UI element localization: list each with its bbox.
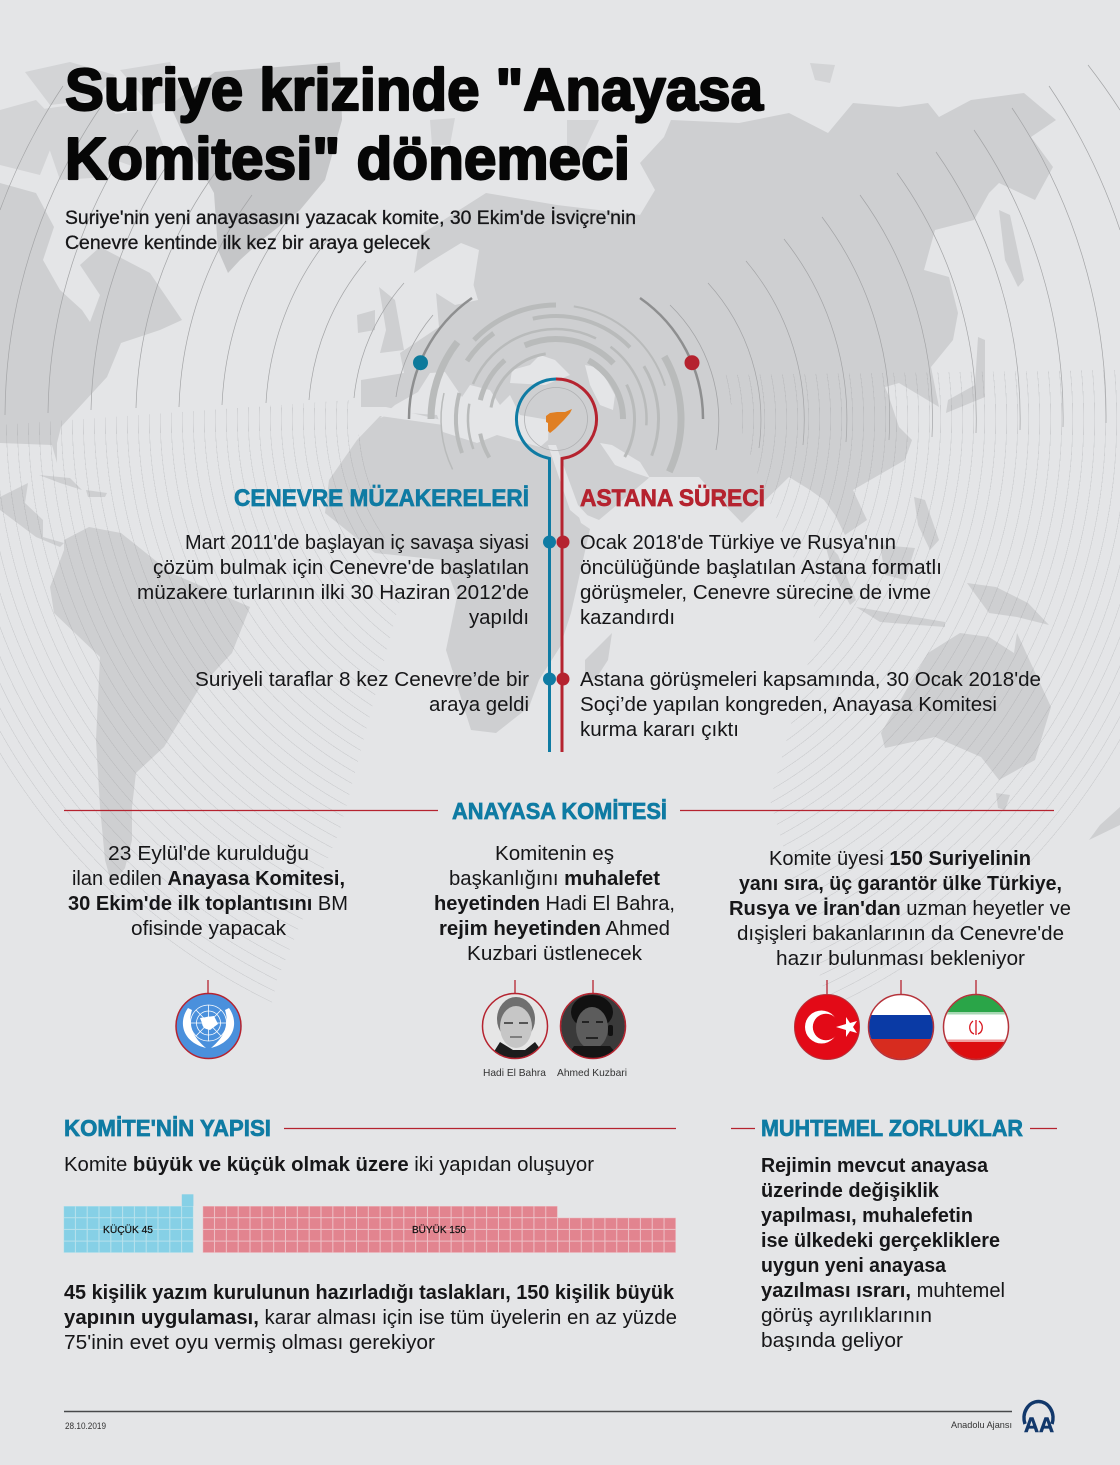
left arc with blue marker bbox=[409, 298, 472, 419]
text: structure intro: Komite büyük ve küçük olmak üzere iki yapıdan oluşuyor bbox=[64, 1154, 594, 1176]
text: column two: heyetinden Hadi El Bahra, bbox=[434, 893, 675, 915]
text: Geneva first item: Mart 2011'de başlayan iç savaşa siyasi bbox=[185, 532, 529, 554]
text: column three: hazır bulunması bekleniyor bbox=[776, 948, 1025, 970]
title: Suriye krizinde "Anayasa bbox=[65, 57, 764, 123]
right arc with red marker bbox=[640, 298, 703, 419]
text: column two: başkanlığını muhalefet bbox=[449, 868, 660, 890]
caption: Ahmed Kuzbari: Ahmed Kuzbari bbox=[557, 1067, 627, 1079]
text: possible difficulties: yazılması ısrarı, muhtemel bbox=[761, 1280, 1005, 1302]
footer rule bbox=[64, 1410, 1012, 1412]
text: Geneva second item bbox=[195, 669, 529, 716]
text: possible difficulties: başında geliyor bbox=[761, 1330, 903, 1352]
text: column one: ilan edilen Anayasa Komitesi, bbox=[72, 868, 345, 890]
text: possible difficulties: uygun yeni anayasa bbox=[761, 1255, 947, 1277]
world map background bbox=[0, 62, 1120, 885]
text: column two: rejim heyetinden Ahmed bbox=[439, 918, 670, 940]
text: column two bbox=[434, 843, 675, 965]
text: Astana first item: görüşmeler, Cenevre sürecine de ivme bbox=[580, 582, 931, 604]
text: possible difficulties: ise ülkedeki gerçekliklere bbox=[761, 1230, 1000, 1252]
text: Geneva second item: araya geldi bbox=[429, 694, 529, 716]
icon: Anadolu Agency logo: AA bbox=[1024, 1414, 1054, 1437]
text: possible difficulties: Rejimin mevcut anayasa bbox=[761, 1155, 989, 1177]
text: possible difficulties bbox=[761, 1155, 1005, 1352]
concentric fine ring lines bbox=[0, 360, 1120, 1020]
text: Astana second item: Astana görüşmeleri kapsamında, 30 Ocak 2018'de bbox=[580, 669, 1041, 691]
thin upper radar arcs bbox=[0, 65, 1120, 448]
heading: committee structure: KOMİTE'NİN YAPISI bbox=[64, 1115, 271, 1141]
unit chart: large body 150 bbox=[203, 1206, 676, 1253]
section heading: constitutional committee: ANAYASA KOMİTESİ bbox=[452, 798, 667, 824]
text: Geneva first item: müzakere turlarının ilki 30 Haziran 2012'de bbox=[137, 582, 529, 604]
text: column three: Rusya ve İran'dan uzman heyetler ve bbox=[729, 897, 1071, 920]
text: Astana second item bbox=[580, 669, 1041, 741]
text: column one: 30 Ekim'de ilk toplantısını BM bbox=[68, 893, 348, 915]
text: column one: 23 Eylül'de kurulduğu bbox=[108, 843, 309, 865]
text: column two: Kuzbari üstlenecek bbox=[467, 943, 643, 965]
text: structure explanation bbox=[64, 1282, 677, 1354]
text: structure explanation: 45 kişilik yazım kurulunun hazırladığı taslakları, 150 kişilik büyük bbox=[64, 1282, 675, 1304]
portrait: Ahmed Kuzbari bbox=[560, 980, 626, 1058]
text: column three: Komite üyesi 150 Suriyelinin bbox=[769, 848, 1031, 870]
unit chart: small body 45: KÜÇÜK 45 bbox=[103, 1224, 153, 1236]
text: column three bbox=[729, 848, 1071, 970]
text: Astana first item: Ocak 2018'de Türkiye ve Rusya'nın bbox=[580, 532, 896, 554]
text: possible difficulties: görüş ayrılıklarının bbox=[761, 1305, 932, 1327]
icon: flag of Iran bbox=[943, 980, 1009, 1061]
portrait: Hadi El Bahra bbox=[482, 980, 548, 1058]
icon: Anadolu Agency logo bbox=[1024, 1401, 1054, 1437]
text: Astana first item bbox=[580, 532, 942, 629]
text: column one bbox=[68, 843, 348, 940]
text: possible difficulties: yapılması, muhalefetin bbox=[761, 1205, 973, 1227]
text: Astana second item: kurma kararı çıktı bbox=[580, 719, 739, 741]
footer agency name: Anadolu Ajansı bbox=[951, 1420, 1012, 1431]
text: column one: ofisinde yapacak bbox=[131, 918, 287, 940]
text: Geneva second item: Suriyeli taraflar 8 kez Cenevre’de bir bbox=[195, 669, 529, 691]
text: column two: Komitenin eş bbox=[495, 843, 614, 865]
heading: Geneva talks: CENEVRE MÜZAKERELERİ bbox=[234, 485, 529, 512]
unit chart: large body 150: BÜYÜK 150 bbox=[412, 1224, 466, 1236]
text: Astana second item: Soçi’de yapılan kongreden, Anayasa Komitesi bbox=[580, 694, 997, 716]
icon: flag of Russia bbox=[868, 980, 934, 1061]
text: column three: dışişleri bakanlarının da Cenevre'de bbox=[737, 923, 1064, 945]
text: Astana first item: kazandırdı bbox=[580, 607, 675, 629]
text: Geneva first item: yapıldı bbox=[469, 607, 529, 629]
icon: flag of Turkey bbox=[794, 980, 860, 1060]
radar segments around Syria bbox=[396, 305, 719, 472]
text: possible difficulties: üzerinde değişiklik bbox=[761, 1180, 940, 1202]
heading: Astana process: ASTANA SÜRECİ bbox=[580, 485, 765, 512]
text: structure explanation: yapının uygulaması, karar alması için ise tüm üyelerin en az yüzde bbox=[64, 1307, 677, 1329]
map of Syria bbox=[546, 409, 572, 433]
heading: possible difficulties: MUHTEMEL ZORLUKLAR bbox=[761, 1115, 1023, 1141]
text: column three: yanı sıra, üç garantör ülke Türkiye, bbox=[739, 873, 1062, 895]
subtitle bbox=[65, 208, 636, 254]
text: Astana first item: öncülüğünde başlatılan Astana formatlı bbox=[580, 557, 942, 579]
icon: United Nations emblem bbox=[176, 980, 241, 1058]
title bbox=[65, 57, 764, 192]
text: Geneva first item: çözüm bulmak için Cenevre'de başlatılan bbox=[153, 557, 529, 579]
unit chart: small body 45 bbox=[64, 1194, 193, 1253]
text: Geneva first item bbox=[137, 532, 529, 629]
title: Komitesi" dönemeci bbox=[65, 126, 630, 192]
subtitle: Suriye'nin yeni anayasasını yazacak komite, 30 Ekim'de İsviçre'nin bbox=[65, 208, 636, 229]
footer date: 28.10.2019 bbox=[65, 1421, 106, 1431]
subtitle: Cenevre kentinde ilk kez bir araya gelecek bbox=[65, 233, 431, 254]
red timeline: Astana bbox=[556, 379, 597, 752]
caption: Hadi El Bahra: Hadi El Bahra bbox=[483, 1067, 546, 1079]
text: structure explanation: 75'inin evet oyu vermiş olması gerekiyor bbox=[64, 1332, 435, 1354]
blue timeline: Geneva bbox=[516, 379, 556, 752]
